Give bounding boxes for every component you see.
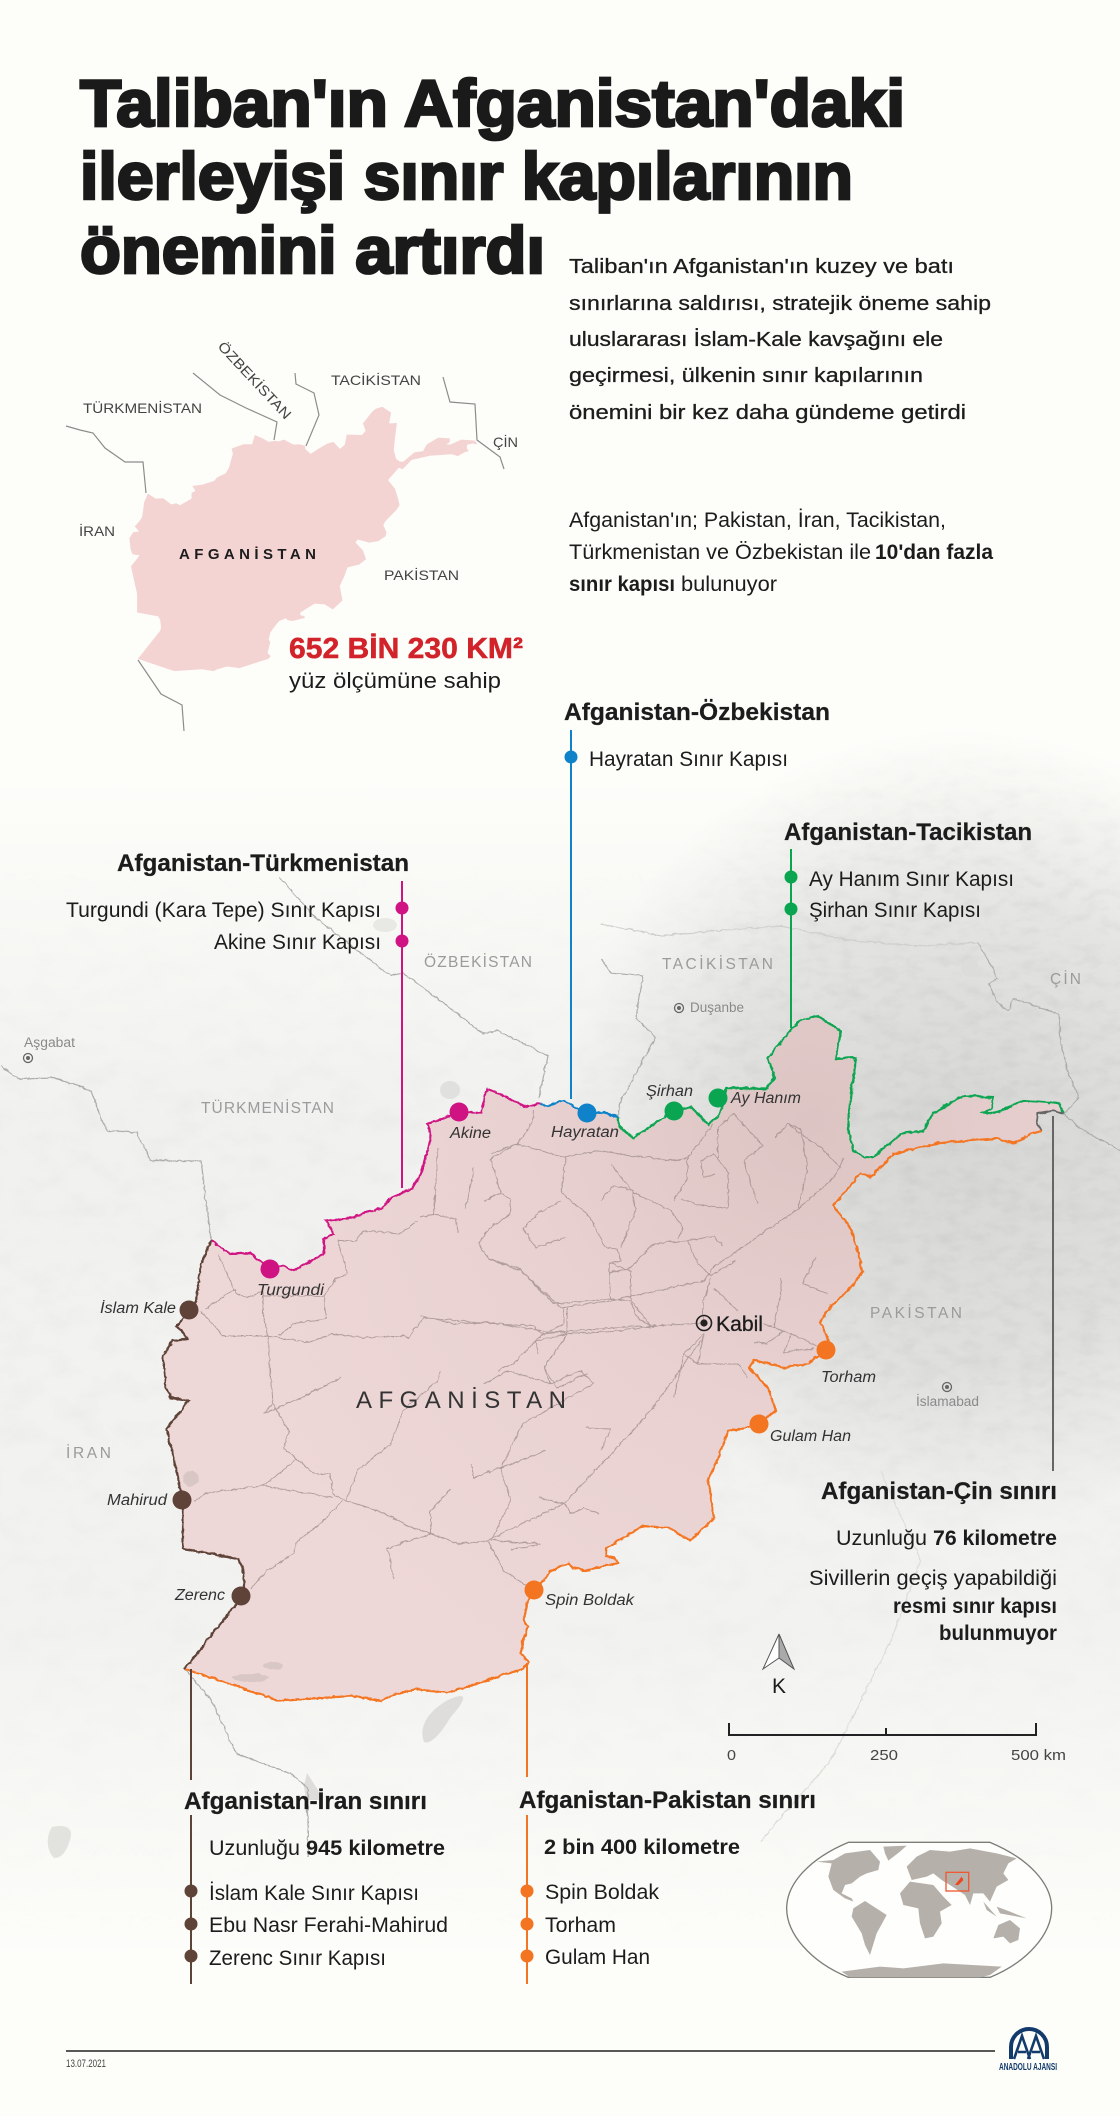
locator map of Afghanistan: TÜRKMENİSTAN bbox=[83, 399, 202, 416]
capital cities: İslamabad bbox=[916, 1394, 979, 1409]
border gates paragraph: Afganistan'ın; Pakistan, İran, Tacikistan, bbox=[569, 509, 946, 532]
title: Taliban'ın Afganistan'daki bbox=[80, 66, 905, 140]
world locator map bbox=[787, 1842, 1052, 1977]
map country labels: TÜRKMENİSTAN bbox=[201, 1099, 334, 1117]
map country labels bbox=[66, 953, 1081, 1462]
panel: Afghanistan-China border bbox=[809, 1116, 1057, 1645]
border gate markers and names: Torham bbox=[821, 1369, 876, 1386]
area callout: 652 BİN 230 KM² bbox=[289, 633, 523, 665]
panel: Afghanistan-China border: 76 kilometre bbox=[933, 1527, 1057, 1550]
scale bar bbox=[727, 1723, 1066, 1764]
locator map of Afghanistan: İRAN bbox=[79, 522, 115, 539]
Uzbekistan border bbox=[540, 1100, 617, 1116]
intro paragraph: uluslararası İslam-Kale kavşağını ele bbox=[569, 328, 943, 351]
panel: Afghanistan-Uzbekistan: Afganistan-Özbekistan bbox=[564, 699, 830, 726]
border gate markers and names: Zerenc bbox=[174, 1587, 225, 1604]
border gate markers and names: Gulam Han bbox=[770, 1428, 851, 1445]
border gate markers and names: İslam Kale bbox=[100, 1300, 176, 1317]
title: önemini artırdı bbox=[80, 213, 545, 287]
icon: north arrow bbox=[763, 1634, 794, 1698]
map country labels: ÇİN bbox=[1050, 970, 1081, 988]
panel: Afghanistan-Uzbekistan bbox=[564, 699, 830, 1099]
locator map of Afghanistan: TACİKİSTAN bbox=[331, 371, 421, 388]
intro paragraph: Taliban'ın Afganistan'ın kuzey ve batı bbox=[569, 255, 954, 278]
panel: Afghanistan-China border: bulunmuyor bbox=[939, 1622, 1057, 1645]
border gate markers and names: Mahirud bbox=[107, 1492, 168, 1509]
footer rule bbox=[66, 2050, 995, 2052]
map country labels: AFGANİSTAN bbox=[356, 1387, 566, 1414]
locator map of Afghanistan: ÖZBEKİSTAN bbox=[215, 337, 295, 422]
panel: Afghanistan-Iran border: Ebu Nasr Ferahi-Mahirud bbox=[209, 1914, 448, 1937]
road network bbox=[193, 1110, 843, 1590]
panel: Afghanistan-Tajikistan: Afganistan-Tacikistan bbox=[784, 819, 1032, 846]
date: 13.07.2021 bbox=[66, 2058, 106, 2070]
panel: Afghanistan-China border: Afganistan-Çin sınırı bbox=[821, 1478, 1057, 1505]
panel: Afghanistan-China border: Uzunluğu bbox=[836, 1527, 927, 1550]
logo: Anadolu Ajansı: ANADOLU AJANSI bbox=[999, 2062, 1057, 2073]
border gate markers and names: Hayratan bbox=[551, 1124, 619, 1141]
panel: Afghanistan-Iran border: Zerenc Sınır Kapısı bbox=[209, 1947, 386, 1970]
panel: Afghanistan-Pakistan border: Torham bbox=[545, 1914, 616, 1937]
scale bar: 0 bbox=[727, 1748, 736, 1764]
panel: Afghanistan-Tajikistan bbox=[784, 819, 1032, 1028]
panel: Afghanistan-Pakistan border: 2 bin 400 kilometre bbox=[544, 1836, 740, 1859]
intro paragraph: önemini bir kez daha gündeme getirdi bbox=[569, 401, 966, 424]
Iran border bbox=[162, 1240, 244, 1668]
panel: Afghanistan-Iran border: 945 kilometre bbox=[306, 1837, 445, 1860]
locator map of Afghanistan bbox=[66, 337, 518, 731]
intro paragraph bbox=[569, 255, 991, 424]
panel: Afghanistan-Tajikistan: Şirhan Sınır Kapısı bbox=[809, 899, 981, 922]
capital cities: Aşgabat bbox=[24, 1035, 75, 1050]
map country labels: İRAN bbox=[66, 1444, 111, 1462]
panel: Afghanistan-Turkmenistan: Turgundi (Kara Tepe) Sınır Kapısı bbox=[66, 899, 381, 922]
terrain background bbox=[0, 776, 1120, 1858]
map country labels: PAKİSTAN bbox=[870, 1304, 962, 1322]
lakes bbox=[182, 1470, 282, 1681]
icon: north arrow: K bbox=[772, 1675, 786, 1698]
panel: Afghanistan-Tajikistan: Ay Hanım Sınır Kapısı bbox=[809, 868, 1014, 891]
panel: Afghanistan-Pakistan border: Gulam Han bbox=[545, 1946, 650, 1969]
logo: Anadolu Ajansı bbox=[999, 2029, 1057, 2073]
Afghanistan fill bbox=[162, 1015, 1063, 1700]
neighbouring country borders bbox=[0, 877, 1120, 1857]
locator map of Afghanistan: ÇİN bbox=[493, 433, 518, 450]
panel: Afghanistan-Iran border: Afganistan-İran sınırı bbox=[184, 1788, 427, 1815]
capital cities: Duşanbe bbox=[690, 1000, 744, 1015]
border gates paragraph: sınır kapısı bbox=[569, 573, 675, 596]
border gate markers and names: Ay Hanım bbox=[730, 1090, 801, 1107]
border gates paragraph bbox=[569, 509, 993, 596]
panel: Afghanistan-Iran border: İslam Kale Sınır Kapısı bbox=[209, 1882, 419, 1905]
map country labels: TACİKİSTAN bbox=[662, 955, 773, 973]
Turkmenistan border bbox=[210, 1088, 540, 1270]
capital cities: Kabil bbox=[716, 1313, 763, 1336]
panel: Afghanistan-Turkmenistan: Afganistan-Türkmenistan bbox=[117, 850, 409, 877]
title bbox=[80, 66, 905, 287]
border gates paragraph: bulunuyor bbox=[681, 573, 777, 596]
border gate markers and names bbox=[100, 1083, 876, 1609]
panel: Afghanistan-Iran border bbox=[184, 1669, 448, 1984]
border gates paragraph: Türkmenistan ve Özbekistan ile bbox=[569, 541, 871, 564]
intro paragraph: sınırlarına saldırısı, stratejik öneme sahip bbox=[569, 292, 991, 315]
scale bar: 500 km bbox=[1011, 1748, 1066, 1764]
scale bar: 250 bbox=[870, 1748, 898, 1764]
panel: Afghanistan-Turkmenistan: Akine Sınır Kapısı bbox=[214, 931, 381, 954]
China border bbox=[1036, 1110, 1063, 1130]
border gate markers and names: Spin Boldak bbox=[545, 1592, 635, 1609]
panel: Afghanistan-Turkmenistan bbox=[66, 850, 409, 1188]
panel: Afghanistan-Pakistan border bbox=[519, 1663, 816, 1984]
intro paragraph: geçirmesi, ülkenin sınır kapılarının bbox=[569, 364, 923, 387]
panel: Afghanistan-Pakistan border: Spin Boldak bbox=[545, 1881, 660, 1904]
panel: Afghanistan-Uzbekistan: Hayratan Sınır Kapısı bbox=[589, 748, 788, 771]
border gate markers and names: Turgundi bbox=[257, 1282, 325, 1299]
border gate markers and names: Şirhan bbox=[646, 1083, 693, 1100]
area callout: yüz ölçümüne sahip bbox=[289, 668, 501, 693]
border gate markers and names: Akine bbox=[449, 1125, 491, 1142]
panel: Afghanistan-China border: resmi sınır kapısı bbox=[893, 1595, 1057, 1618]
capital cities bbox=[24, 1000, 979, 1409]
title: ilerleyişi sınır kapılarının bbox=[80, 139, 853, 213]
panel: Afghanistan-Iran border: Uzunluğu bbox=[209, 1837, 300, 1860]
locator map of Afghanistan: PAKİSTAN bbox=[384, 566, 459, 583]
panel: Afghanistan-China border: Sivillerin geçiş yapabildiği bbox=[809, 1567, 1057, 1590]
map country labels: ÖZBEKİSTAN bbox=[424, 953, 532, 971]
panel: Afghanistan-Pakistan border: Afganistan-Pakistan sınırı bbox=[519, 1787, 816, 1814]
area callout bbox=[289, 633, 523, 693]
main map with borders and roads bbox=[0, 877, 1120, 1857]
Tajikistan border bbox=[617, 1015, 1063, 1157]
border gates paragraph: 10'dan fazla bbox=[875, 541, 993, 564]
locator map of Afghanistan: AFGANİSTAN bbox=[179, 546, 316, 563]
Pakistan border bbox=[184, 1130, 1041, 1700]
